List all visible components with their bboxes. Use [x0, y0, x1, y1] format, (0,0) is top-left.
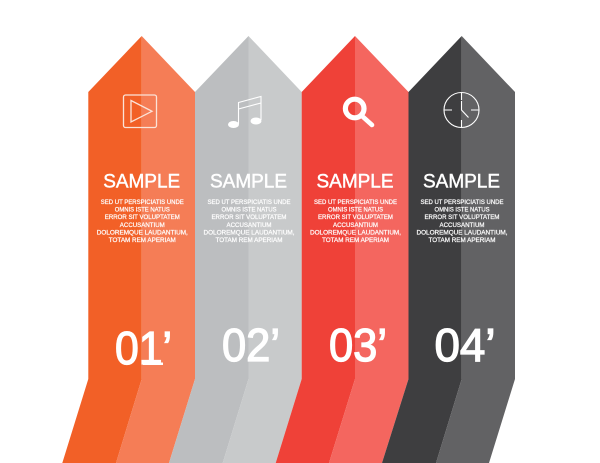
text block: description 2: ACCUSANTIUM [226, 222, 272, 229]
heading: sample 1: SAMPLE [103, 170, 180, 192]
icon: clock [444, 92, 479, 128]
panel: column 02 gray arrow [169, 36, 302, 463]
text block: description 1 [97, 199, 188, 244]
text block: description 4: ACCUSANTIUM [440, 222, 485, 229]
text block: description 2: OMNIS ISTE NATUS [222, 207, 277, 214]
text block: description 3: DOLOREMQUE LAUDANTIUM, [310, 229, 401, 236]
text block: description 1: DOLOREMQUE LAUDANTIUM, [97, 229, 188, 236]
text block: description 1: SED UT PERSPICIATIS UNDE [101, 199, 184, 206]
text block: description 2: TOTAM REM APERIAM [216, 237, 283, 244]
text block: description 2: ERROR SIT VOLUPTATEM [212, 214, 287, 221]
panel: column 03 red arrow [276, 36, 408, 463]
text block: description 4: DOLOREMQUE LAUDANTIUM, [416, 229, 508, 236]
panel: column 04 dark arrow [382, 36, 515, 463]
text block: description 4: SED UT PERSPICIATIS UNDE [420, 199, 504, 206]
number: 03: 03’ [329, 319, 387, 371]
number: 02: 02’ [222, 319, 280, 371]
text block: description 3: OMNIS ISTE NATUS [328, 207, 383, 214]
text block: description 1: ERROR SIT VOLUPTATEM [105, 214, 180, 221]
text block: description 2: DOLOREMQUE LAUDANTIUM, [204, 229, 295, 236]
text block: description 3: SED UT PERSPICIATIS UNDE [314, 199, 397, 206]
text block: description 1: ACCUSANTIUM [120, 222, 165, 229]
text block: description 3 [310, 199, 401, 244]
text block: description 1: TOTAM REM APERIAM [109, 237, 176, 244]
text block: description 3: ERROR SIT VOLUPTATEM [318, 214, 393, 221]
heading: sample 2: SAMPLE [210, 170, 287, 192]
text block: description 2 [204, 199, 295, 244]
text block: description 4: TOTAM REM APERIAM [428, 237, 496, 244]
text block: description 4 [416, 199, 508, 244]
text block: description 1: OMNIS ISTE NATUS [115, 207, 170, 214]
icon: music notes [228, 96, 262, 128]
panel: column 01 orange arrow [62, 36, 195, 463]
icon: magnifying glass [345, 99, 372, 125]
text block: description 4: OMNIS ISTE NATUS [434, 207, 490, 214]
text block: description 3: TOTAM REM APERIAM [322, 237, 389, 244]
number: 01: 01’ [115, 322, 172, 374]
number: 04: 04’ [434, 319, 496, 371]
text block: description 4: ERROR SIT VOLUPTATEM [424, 214, 500, 221]
text block: description 2: SED UT PERSPICIATIS UNDE [208, 199, 291, 206]
text block: description 3: ACCUSANTIUM [333, 222, 378, 229]
icon: play button [124, 95, 156, 128]
heading: sample 3: SAMPLE [316, 170, 394, 192]
heading: sample 4: SAMPLE [423, 170, 500, 192]
